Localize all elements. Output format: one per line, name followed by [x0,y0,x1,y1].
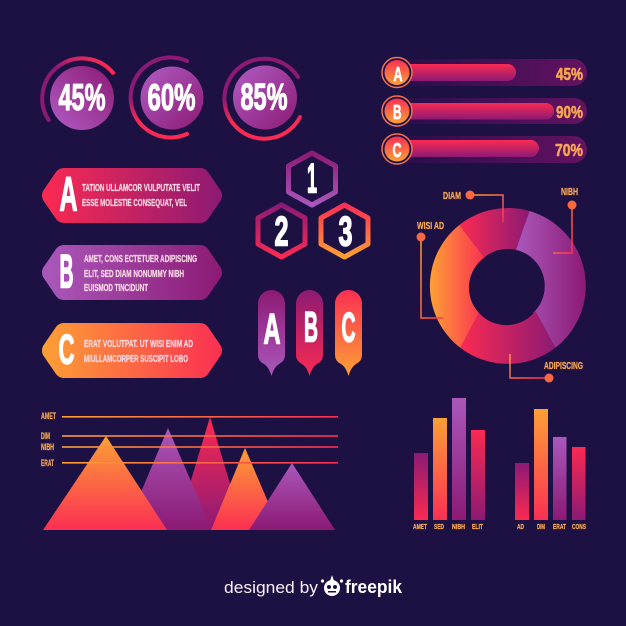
card B: AMET, CONS ECTETUER ADIPISCING [84,254,197,265]
panel: pin tags [258,290,362,376]
bar chart: left group [413,398,485,531]
progress bar A 45% [382,58,587,88]
bar: elit: ELIT [472,522,483,531]
donut chart [430,208,586,364]
progress bar B 90%: B [393,102,402,124]
card C: C [58,326,74,372]
hexagon 3: 3 [338,208,352,254]
pin A: A [264,306,280,354]
level line: dim: DIM [41,431,50,441]
card B: B [60,244,74,298]
pin C: C [342,304,356,350]
gauge: 45%: 45% [58,77,106,118]
card C: MIULLAMCORPER SUSCIPIT LOBO [84,354,188,365]
progress bar B 90% [382,96,587,126]
segment: adipiscing [460,311,556,364]
chart: triangle peaks [41,411,338,530]
level line: nibh: NIBH [41,442,54,452]
callout: wisi ad: WISI AD [417,221,444,232]
footer: freepik credit [224,575,403,597]
peak: small orange [211,448,280,530]
callout: nibh [553,187,578,253]
designed by text: designed by [224,578,319,597]
card A: A [60,168,78,222]
panel: percentage circles [42,58,300,139]
bar: nibh: NIBH [452,522,465,531]
bar: dim: DIM [537,522,545,531]
gauge: 85%: 85% [240,76,288,118]
bar: erat: ERAT [553,522,566,531]
bar chart: right group [515,409,586,531]
hexagon 1: 1 [307,154,317,202]
callout: nibh: NIBH [561,187,578,198]
segment: nibh [516,211,586,348]
segment: wisi ad [430,225,484,348]
card C [42,323,222,378]
level line: erat: ERAT [41,458,54,468]
panel: numbered hexagons [258,153,368,257]
callout: wisi ad [416,221,444,318]
panel: progress bars [382,58,587,164]
callout: diam: DIAM [443,191,461,202]
icon: freepik mascot [321,575,343,596]
progress bar C 70%: 70% [555,140,583,160]
gauge: 85% [224,59,300,139]
gauge: 60%: 60% [148,77,196,118]
progress bar A 45%: 45% [556,64,583,84]
callout: adipiscing: ADIPISCING [544,361,583,372]
hexagon 2: 2 [274,208,288,254]
gauge: 45% [42,58,114,130]
peak: tall purple [125,428,212,530]
peak: right purple [249,463,335,530]
card A: ESSE MOLESTIE CONSEQUAT, VEL [82,198,187,209]
card B: ELIT, SED DIAM NONUMMY NIBH [84,269,184,280]
card A [42,168,222,223]
gauge: 60% [131,58,204,138]
level line: amet: AMET [41,411,56,421]
donut hole [471,249,545,323]
callout: adipiscing [510,354,583,382]
peak: magenta [176,417,244,530]
bar: amet: AMET [413,522,427,531]
bar: ad: AD [517,522,524,531]
progress bar C 70%: C [392,140,402,162]
callout: diam [443,190,503,222]
pin B: B [304,304,318,352]
bar: sed: SED [434,522,444,531]
panel: text cards [42,168,222,378]
freepik wordmark: freepik [345,577,403,597]
progress bar C 70% [382,134,587,164]
card B: EUISMOD TINCIDUNT [84,283,148,294]
segment: diam [459,208,530,258]
progress bar B 90%: 90% [556,102,583,122]
bar: cons: CONS [572,522,586,531]
card B [42,244,222,300]
progress bar A 45%: A [394,64,402,86]
card C: ERAT VOLUTPAT. UT WISI ENIM AD [84,339,193,350]
card A: TATION ULLAMCOR VULPUTATE VELIT [82,183,200,194]
peak: large orange [43,436,167,530]
